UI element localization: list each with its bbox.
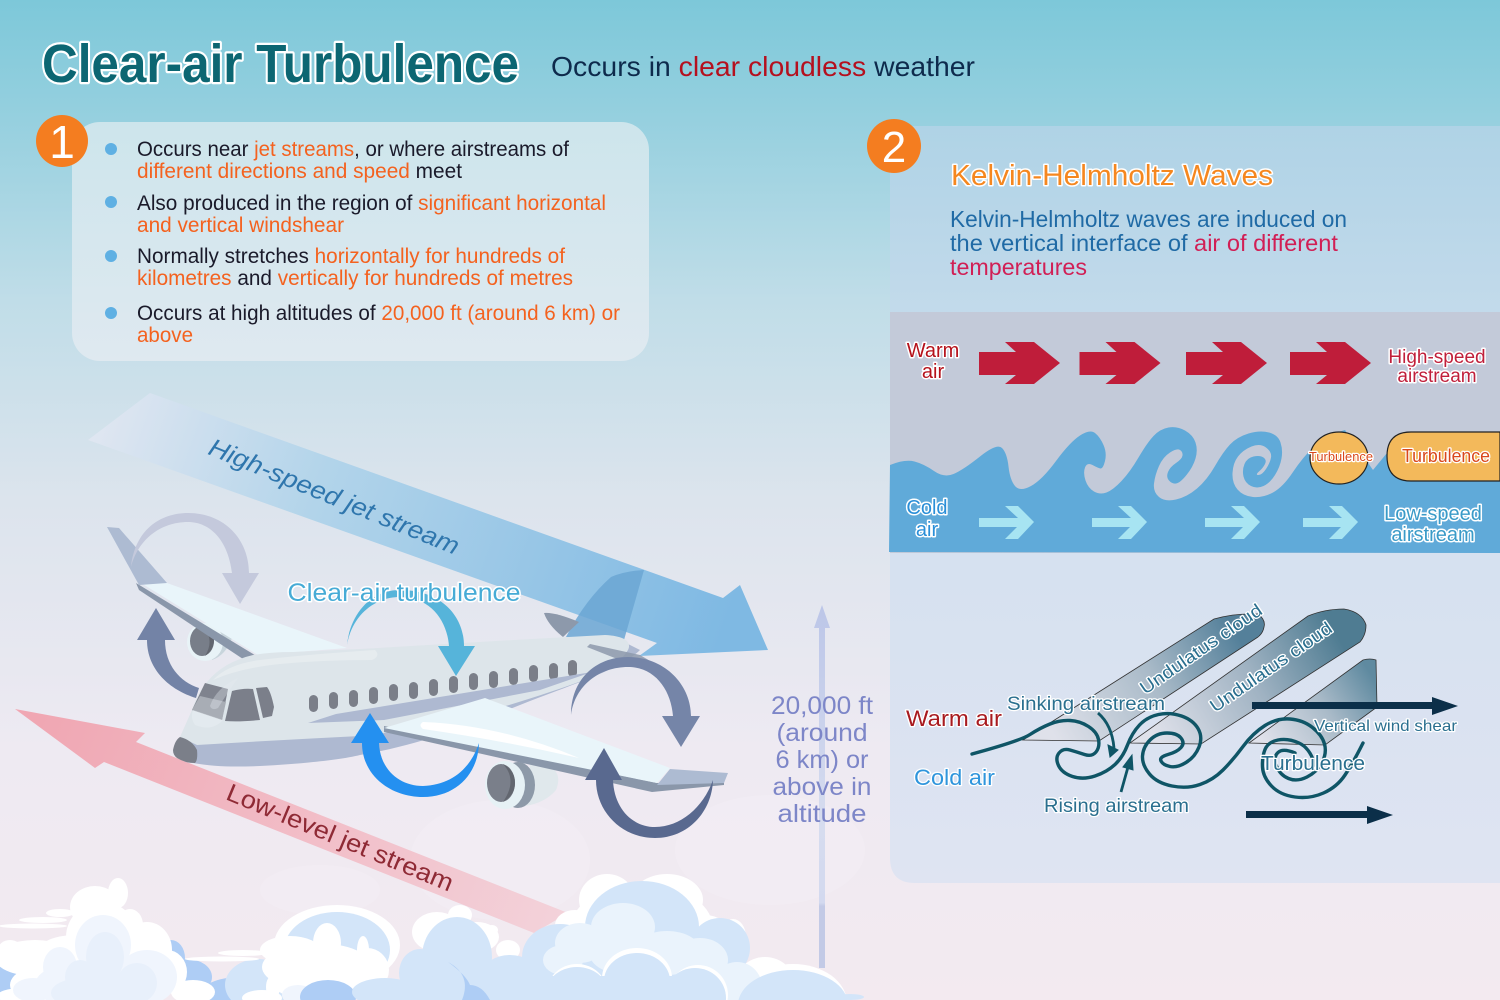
cabin windows — [309, 660, 577, 712]
altitude label: (around — [776, 719, 868, 747]
fuselage — [180, 635, 629, 745]
wind shear arrow upper — [1252, 697, 1458, 715]
cold air wave — [889, 427, 1500, 553]
high-speed airstream label: High-speed — [1388, 347, 1486, 368]
altitude label — [771, 692, 873, 828]
panel heading: Kelvin-Helmholtz Waves — [951, 160, 1273, 192]
altitude label: altitude — [778, 800, 866, 828]
kelvin-helmholtz swirl lines — [972, 714, 1363, 798]
body highlight — [213, 650, 377, 680]
undulatus cloud label 1: Undulatus cloud — [1136, 600, 1266, 698]
high-speed airstream label — [1388, 347, 1486, 387]
altitude label: 20,000 ft — [771, 692, 873, 720]
tail stabilizer — [587, 644, 657, 668]
bullet list: kilometres and vertically for hundreds of metres — [137, 267, 573, 290]
undulatus clouds — [1023, 609, 1377, 745]
panel background — [72, 122, 649, 361]
bullet list: different directions and speed meet — [137, 160, 462, 183]
bullet list: Occurs near jet streams, or where airstreams of — [137, 138, 569, 161]
turbulence arrow: top lilac — [131, 513, 259, 604]
nose cone — [173, 737, 197, 763]
bullet list: Normally stretches horizontally for hundreds of — [137, 245, 565, 268]
warm air band — [890, 312, 1500, 553]
badge 2 — [867, 119, 921, 173]
turbulence arrow: centre cyan — [347, 590, 475, 676]
bullet list: Occurs at high altitudes of 20,000 ft (around 6 km) or — [137, 302, 620, 325]
bullet list: and vertical windshear — [137, 214, 344, 237]
far wing — [107, 527, 347, 659]
far stabilizer — [544, 613, 579, 637]
altitude label: above in — [772, 773, 872, 801]
turbulence label lower: Turbulence — [1261, 753, 1365, 775]
airplane — [107, 527, 728, 809]
middle cloud — [185, 905, 400, 1000]
faint background clouds — [260, 795, 865, 920]
warm air label — [907, 340, 959, 383]
low-speed airstream label: airstream — [1391, 524, 1475, 546]
warm air label lower: Warm air — [906, 706, 1002, 731]
turbulence pill — [1387, 432, 1500, 481]
panel description: the vertical interface of air of different — [950, 230, 1339, 256]
turbulence circle — [1309, 432, 1373, 484]
cold air arrows — [979, 506, 1358, 539]
badge 1 — [36, 115, 88, 168]
cockpit windows — [192, 678, 274, 728]
low-speed airstream label — [1384, 503, 1482, 546]
cold air label: air — [916, 519, 938, 541]
far engine — [187, 623, 232, 661]
high-speed jet stream arrow: High-speed jet stream — [205, 433, 463, 561]
low-level jet stream arrow: Low-level jet stream — [222, 779, 458, 897]
title: Clear-air Turbulence — [42, 34, 519, 94]
bullet list: above — [137, 324, 193, 347]
panel 2: Kelvin-Helmholtz waves — [867, 119, 1500, 883]
panel 1: key facts — [36, 115, 649, 361]
high-speed jet stream arrow — [88, 393, 768, 656]
right cloud — [520, 874, 864, 1000]
low-level jet stream arrow — [15, 709, 568, 933]
wind shear arrow lower — [1246, 806, 1393, 824]
subtitle: Occurs in clear cloudless weather — [551, 51, 975, 82]
warm air arrows — [979, 342, 1371, 384]
undulatus cloud label 2: Undulatus cloud — [1206, 618, 1336, 716]
panel background — [890, 126, 1500, 883]
tail fin — [566, 570, 644, 640]
belly — [177, 640, 640, 767]
bullet list: Also produced in the region of significant horizontal — [137, 192, 606, 215]
cold air label lower: Cold air — [914, 765, 995, 790]
centre cloud — [352, 905, 550, 1000]
turbulence arrow: left slate — [137, 608, 199, 698]
rising airstream arrow — [1121, 755, 1133, 792]
high-speed airstream label: airstream — [1397, 366, 1477, 387]
altitude label: 6 km) or — [776, 746, 868, 774]
warm air label: air — [922, 361, 944, 383]
vertical wind shear label: Vertical wind shear — [1314, 718, 1458, 735]
fuselage side stripe — [308, 672, 592, 723]
turbulence arrow: bottom navy — [585, 748, 713, 838]
badge 1: 1 — [49, 116, 75, 168]
badge 2: 2 — [882, 123, 906, 172]
turbulence circle: Turbulence — [1309, 450, 1373, 464]
panel description — [950, 206, 1347, 280]
cold air label — [906, 497, 948, 541]
bullet list — [105, 138, 620, 347]
rising airstream label: Rising airstream — [1044, 795, 1189, 817]
near engine — [485, 761, 558, 809]
label: clear-air turbulence: Clear-air turbulence — [288, 579, 520, 607]
panel description: Kelvin-Helmholtz waves are induced on — [950, 206, 1347, 232]
near wing — [384, 698, 728, 792]
altitude arrow — [814, 605, 830, 968]
turbulence pill: Turbulence — [1402, 446, 1490, 466]
cold air label: Cold — [906, 497, 948, 519]
left cloud — [0, 878, 290, 1000]
clouds at bottom — [0, 874, 864, 1000]
turbulence arrow: bright blue — [351, 713, 479, 797]
panel description: temperatures — [950, 254, 1087, 280]
turbulence arrow: right slate — [571, 657, 700, 747]
sinking airstream arrow — [1098, 713, 1118, 757]
warm air label: Warm — [907, 340, 959, 362]
low-speed airstream label: Low-speed — [1384, 503, 1482, 525]
sinking airstream label: Sinking airstream — [1007, 693, 1165, 715]
